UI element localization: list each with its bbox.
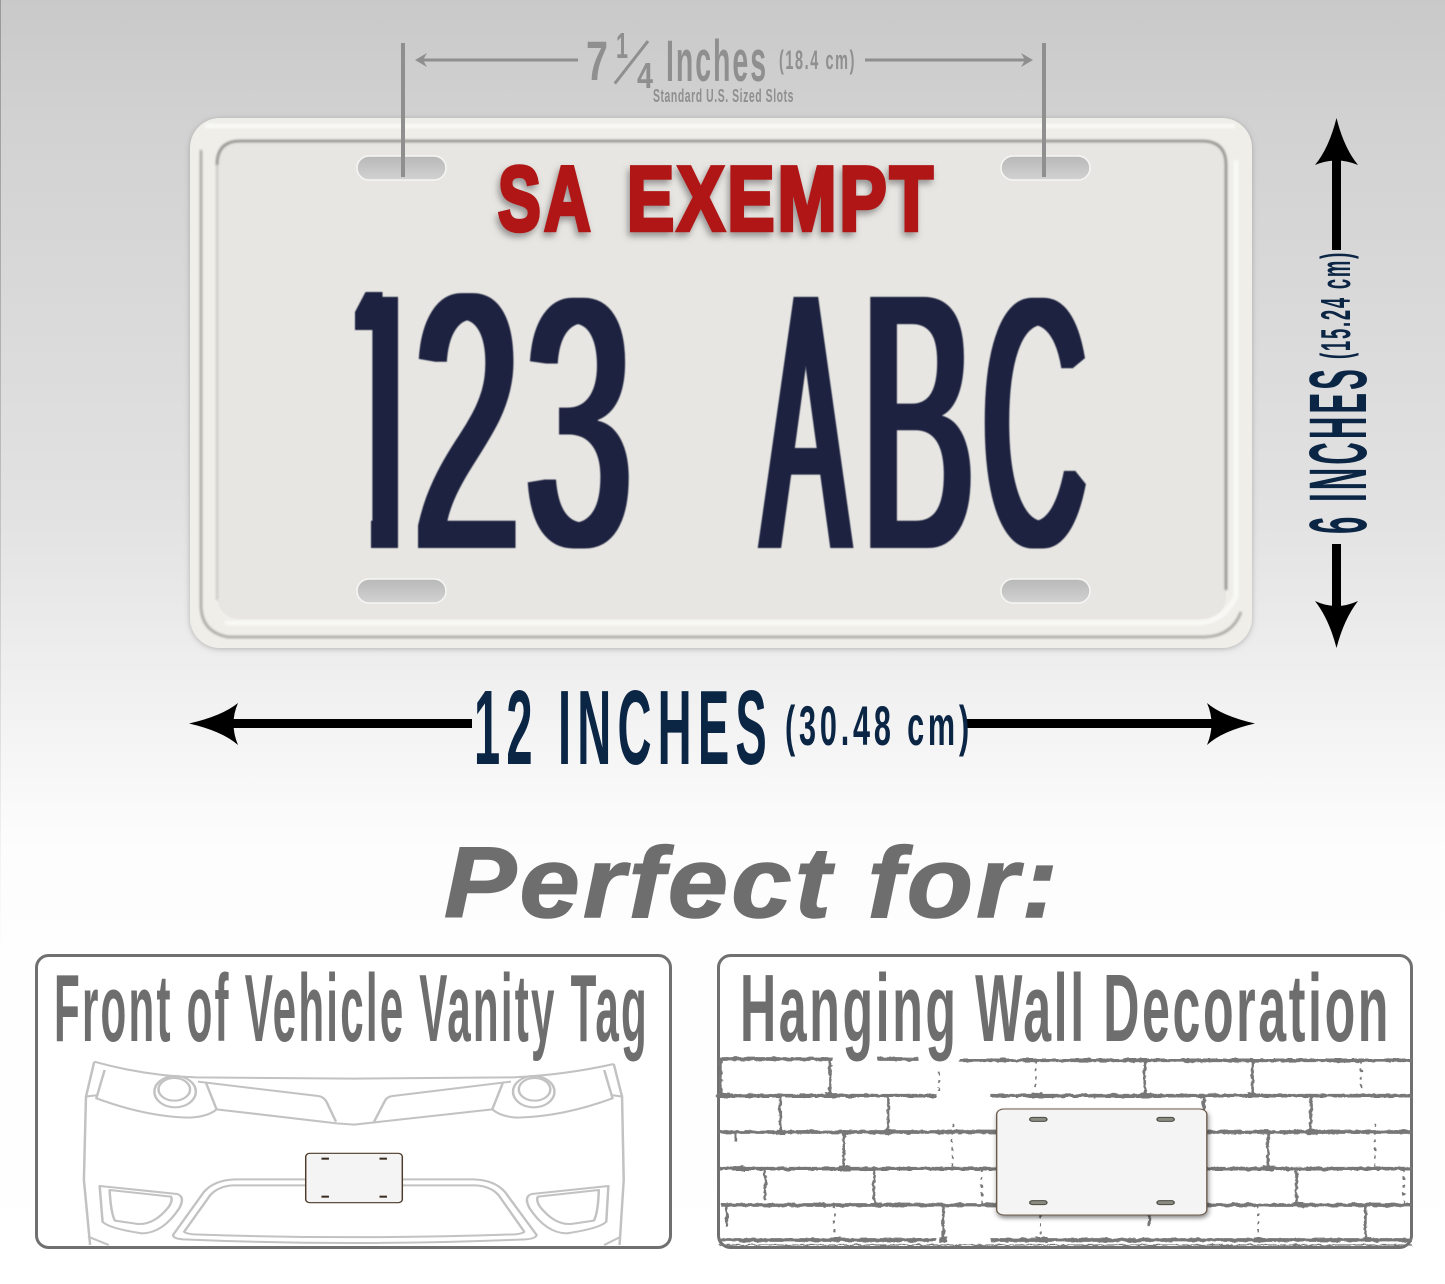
brick wall — [717, 1059, 1412, 1245]
plate header: SA EXEMPT: EXEMPT — [627, 149, 936, 250]
width dimension: 12 inches: 12 INCHES — [474, 669, 773, 787]
panel: front of vehicle — [36, 955, 670, 1248]
plate on wall — [997, 1109, 1207, 1215]
plate number: 123 ABC: C — [983, 226, 1086, 621]
plate header: SA EXEMPT: SA — [498, 149, 594, 250]
panel: wall decoration — [717, 955, 1412, 1248]
slot spacing dimension: 7 1/4 inches: 7 — [586, 29, 608, 92]
slot spacing dimension: 7 1/4 inches: 4 — [637, 55, 653, 96]
plate number: 123 ABC: 3 — [526, 226, 632, 621]
small plate on car — [306, 1153, 402, 1203]
slot spacing dimension: 7 1/4 inches: (18.4 cm) — [779, 45, 856, 75]
plate number: 123 ABC — [354, 291, 1087, 550]
plate number: 123 ABC: 2 — [414, 218, 520, 626]
car front line drawing — [84, 1062, 624, 1245]
width dimension: 12 inches: (30.48 cm) — [785, 694, 973, 757]
slot spacing dimension: 7 1/4 inches — [401, 25, 1046, 177]
slot spacing dimension: 7 1/4 inches: Standard U.S. Sized Slots — [653, 86, 794, 106]
plate header: SA EXEMPT — [498, 149, 936, 250]
plate number: 123 ABC: B — [862, 219, 974, 626]
plate number: 123 ABC: 1 — [332, 219, 433, 626]
license plate — [190, 118, 1252, 648]
height dimension: 6 inches: (15.24 cm) — [1312, 251, 1359, 359]
mounting slots — [357, 156, 1090, 603]
heading: Perfect for: Perfect for: — [444, 827, 1061, 939]
slot spacing dimension: 7 1/4 inches: 1 — [616, 25, 628, 66]
slot spacing dimension: 7 1/4 inches: Inches — [666, 29, 768, 94]
width dimension: 12 inches — [189, 669, 1255, 787]
text: Front of Vehicle Vanity Tag — [54, 955, 649, 1062]
plate number: 123 ABC: A — [763, 217, 849, 625]
height dimension: 6 inches: 6 INCHES — [1293, 366, 1384, 534]
